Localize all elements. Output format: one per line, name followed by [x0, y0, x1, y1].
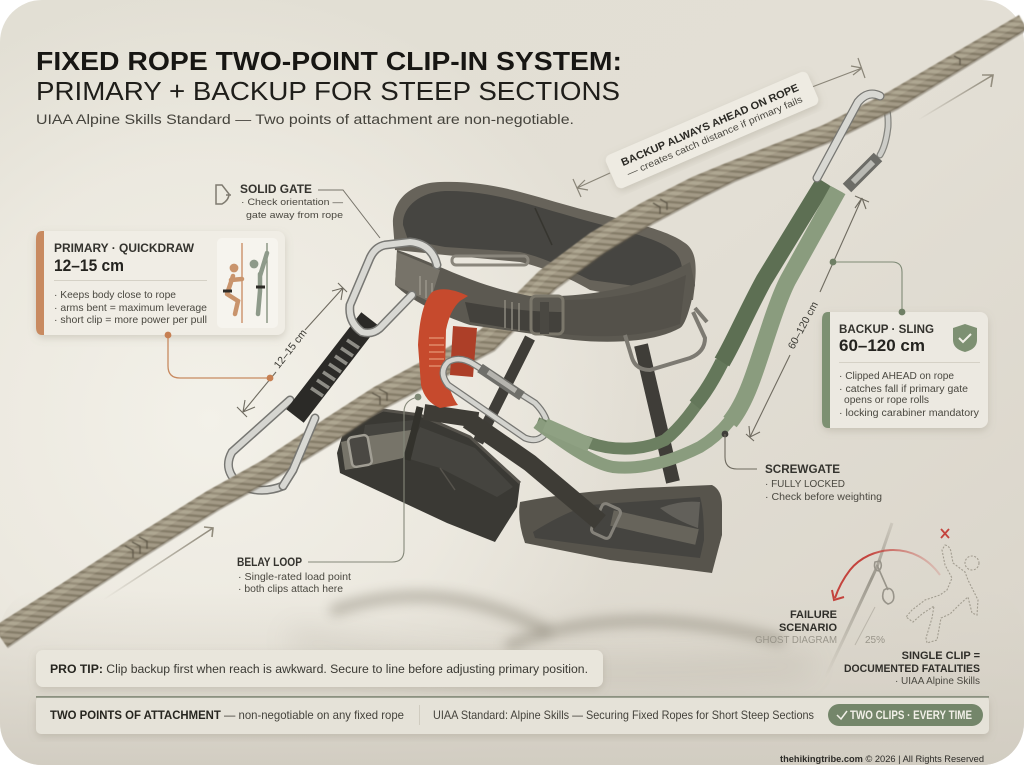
callout: backup always ahead on rope [604, 70, 820, 190]
pro tip bar [36, 650, 603, 687]
panel: primary quickdraw [36, 231, 285, 335]
icon: shield check [953, 324, 977, 352]
failure scenario ghost diagram: 25% [865, 635, 885, 646]
harness: vertical straps [478, 338, 673, 482]
failure scenario ghost diagram: · UIAA Alpine Skills [895, 676, 980, 687]
belay loop (red) [418, 289, 477, 408]
quickdraw: sewn dogbone [295, 319, 370, 416]
callout: belay loop: · Single-rated load point [238, 572, 351, 583]
failure scenario ghost diagram: DOCUMENTED FATALITIES [844, 663, 980, 675]
heading: primary quickdraw: PRIMARY · QUICKDRAW [54, 243, 194, 255]
callout: screwgate: · Check before weighting [765, 492, 882, 503]
callout: solid gate [216, 184, 380, 238]
dimension arrow: backup ahead on rope [573, 58, 865, 197]
footer bar [36, 696, 989, 734]
harness: front waist belt [395, 250, 695, 342]
subtitle: UIAA Alpine Skills Standard — Two points of attachment are non-negotiable. [36, 112, 574, 127]
title [36, 46, 622, 106]
heading: backup sling: BACKUP · SLING [839, 324, 934, 336]
harness: right gear loop [625, 308, 707, 370]
quickdraw: lower carabiner gate [283, 418, 315, 486]
failure scenario ghost diagram [755, 523, 980, 687]
ghost quickdraw [874, 561, 894, 604]
fatalities label: SINGLE CLIP = [902, 650, 980, 662]
red x [941, 529, 949, 538]
callout: solid gate: · Check orientation — [241, 197, 344, 208]
backup locking carabiner [443, 359, 548, 440]
bullet list: backup benefits: opens or rope rolls [844, 395, 929, 406]
title: FIXED ROPE TWO-POINT CLIP-IN SYSTEM: [36, 46, 622, 76]
icon: arm leverage figures [217, 238, 278, 328]
harness: crossing leg strap [424, 412, 600, 522]
bullet list: backup benefits: · locking carabiner mandatory [839, 408, 979, 419]
callout: backup always ahead on rope: BACKUP ALWAYS AHEAD ON ROPE [619, 82, 801, 169]
rope chevron marks [125, 56, 960, 558]
title: PRIMARY + BACKUP FOR STEEP SECTIONS [36, 76, 620, 106]
bullet list: primary benefits: · short clip = more power per pull [54, 315, 207, 326]
statement: two points: TWO POINTS OF ATTACHMENT — non-negotiable on any fixed rope [50, 709, 404, 722]
leader line: backup card to sling dimension [830, 259, 905, 315]
pill: two clips every time: TWO CLIPS · EVERY TIME [850, 710, 972, 722]
backup sling (green) [537, 182, 838, 468]
callout: belay loop: · both clips attach here [238, 584, 344, 595]
rope direction arrow: lower left [103, 527, 213, 600]
callout: screwgate: · FULLY LOCKED [765, 479, 845, 490]
dimension arrow: 60–120 cm: 60–120 cm [786, 300, 821, 351]
backup carabiner on rope [817, 94, 880, 188]
value: 60–120 cm: 60–120 cm [839, 336, 925, 355]
bullet list: backup benefits: · catches fall if primary gate [839, 384, 968, 395]
failure scenario ghost diagram: GHOST DIAGRAM [755, 635, 837, 646]
failure label: FAILURE [790, 609, 837, 621]
bullet list: primary benefits [54, 290, 207, 326]
quickdraw: upper carabiner [350, 242, 437, 333]
harness: rear gear loop [452, 256, 528, 265]
callout: belay loop: BELAY LOOP [237, 557, 302, 569]
ground shadow of harness [300, 596, 800, 673]
value: 12–15 cm: 12–15 cm [54, 256, 124, 275]
ghost rope [825, 523, 892, 678]
callout: screwgate: SCREWGATE [765, 464, 840, 476]
leader line: primary card to quickdraw [165, 332, 273, 381]
statement: uiaa standard: UIAA Standard: Alpine Skills — Securing Fixed Ropes for Short Steep Sections [433, 709, 814, 722]
copyright: thehikingtribe.com © 2026 | All Rights Reserved [780, 753, 984, 764]
callout: solid gate: SOLID GATE [240, 184, 312, 196]
harness: right leg loop [519, 485, 722, 573]
callout: belay loop [237, 394, 421, 595]
panel: backup sling [822, 312, 988, 428]
bullet list: backup benefits: · Clipped AHEAD on rope [839, 371, 954, 382]
ghost falling figure [906, 545, 979, 643]
dimension arrow: 12–15 cm: 12–15 cm [272, 327, 310, 371]
callout: screwgate [722, 431, 882, 503]
pill: two clips every time [828, 704, 983, 726]
callout: backup always ahead on rope: — creates catch distance if primary fails [626, 94, 805, 180]
bullet list: backup benefits [839, 371, 979, 419]
bullet list: primary benefits: · Keeps body close to rope [54, 290, 176, 301]
failure scenario ghost diagram: SCENARIO [779, 622, 837, 634]
red fall arc [832, 550, 940, 600]
bullet list: primary benefits: · arms bent = maximum leverage [54, 303, 207, 314]
pro tip bar: PRO TIP: Clip backup first when reach is awkward. Secure to line before adjusting primary position. [50, 662, 588, 676]
harness: waist belt back pad [393, 182, 696, 300]
callout: solid gate: gate away from rope [246, 210, 343, 221]
dimension arrow: 12–15 cm [237, 283, 347, 417]
harness: left leg loop [337, 407, 520, 542]
dimension arrow: 60–120 cm [746, 196, 869, 441]
quickdraw: lower carabiner body [228, 400, 293, 490]
carabiner back wire at backup anchor [880, 96, 888, 155]
rope direction arrow: upper right [918, 75, 993, 120]
icon: solid gate carabiner [216, 185, 231, 204]
